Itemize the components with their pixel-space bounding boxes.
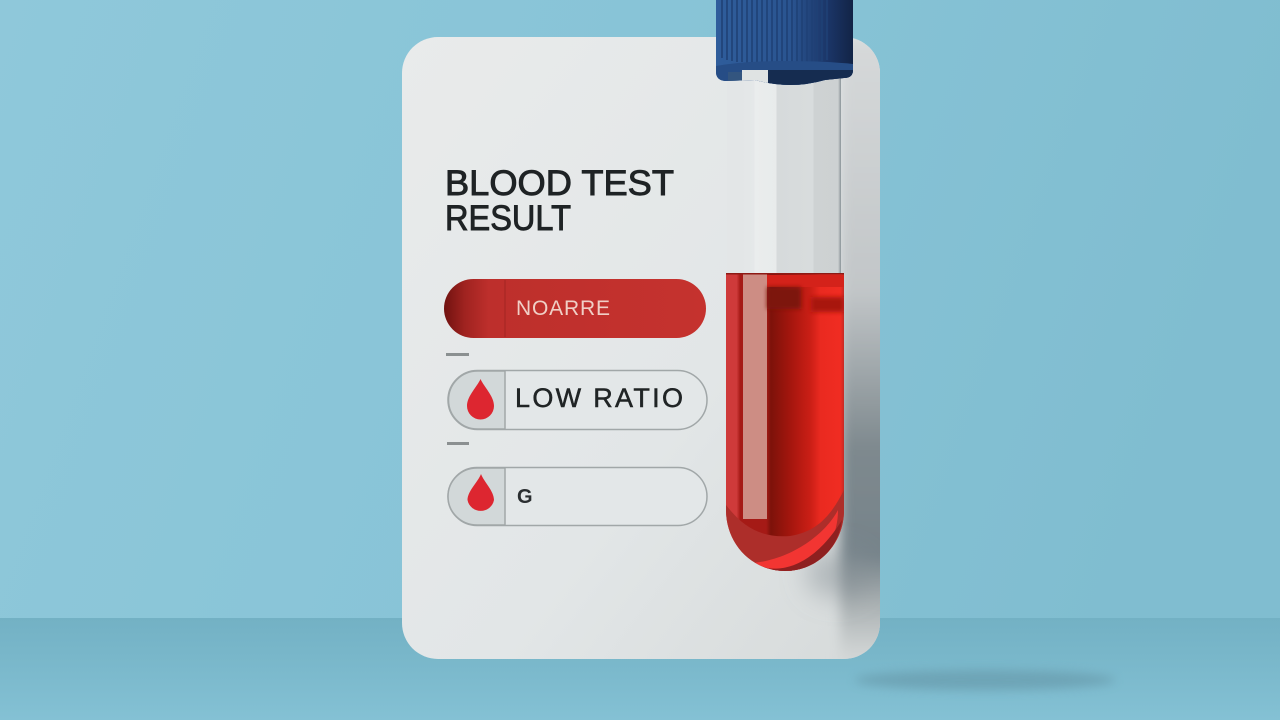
low ratio label: LOW RATIO [515,383,683,413]
c label: G [517,486,533,508]
tube shadow on card [799,38,880,659]
blood [726,274,844,575]
blue cap [716,0,853,90]
title [445,164,674,238]
floor [0,618,1280,720]
icon: blood drop [467,379,494,420]
red status pill [444,279,706,338]
divider dash [447,442,469,445]
c pill [448,468,707,526]
tube glass [741,70,841,276]
red status pill: NOARRE [516,297,610,320]
blood highlight [743,274,767,519]
low ratio pill [448,370,707,430]
panel: result card [402,37,900,670]
floor shadow [855,670,1115,690]
divider dash [446,353,469,356]
icon: blood drop [468,474,494,511]
icon: test tube [716,0,853,575]
title: BLOOD TEST [445,164,674,203]
title: RESULT [445,199,571,238]
